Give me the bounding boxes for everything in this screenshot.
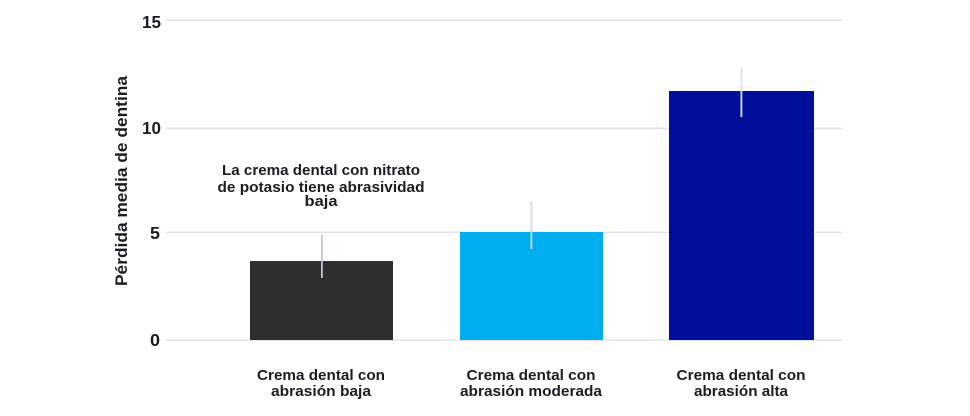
y axis tick labels: 10 bbox=[142, 118, 161, 138]
bar: high abrasion bbox=[669, 68, 814, 340]
bar: moderate abrasion bbox=[460, 202, 603, 340]
callout: potassium nitrate toothpaste: de potasio tiene abrasividad bbox=[218, 179, 424, 196]
bar: low abrasion bbox=[250, 235, 393, 340]
y axis title: Pérdida media de dentina bbox=[112, 75, 131, 286]
callout: potassium nitrate toothpaste: baja bbox=[304, 193, 338, 210]
y axis tick labels bbox=[142, 12, 161, 350]
callout: potassium nitrate toothpaste bbox=[218, 162, 424, 210]
y axis tick labels: 0 bbox=[150, 330, 160, 350]
x label: high abrasion bbox=[676, 367, 806, 400]
x label: high abrasion: Crema dental con bbox=[676, 367, 806, 384]
x label: low abrasion: abrasión baja bbox=[271, 383, 372, 400]
y axis tick labels: 5 bbox=[150, 223, 160, 243]
callout: potassium nitrate toothpaste: La crema dental con nitrato bbox=[222, 162, 420, 179]
x label: low abrasion bbox=[257, 367, 385, 400]
x label: moderate abrasion bbox=[460, 367, 603, 400]
x label: moderate abrasion: Crema dental con bbox=[466, 367, 596, 384]
x label: high abrasion: abrasión alta bbox=[694, 383, 789, 400]
x label: low abrasion: Crema dental con bbox=[257, 367, 385, 384]
y axis tick labels: 15 bbox=[142, 12, 161, 32]
x label: moderate abrasion: abrasión moderada bbox=[460, 383, 603, 400]
